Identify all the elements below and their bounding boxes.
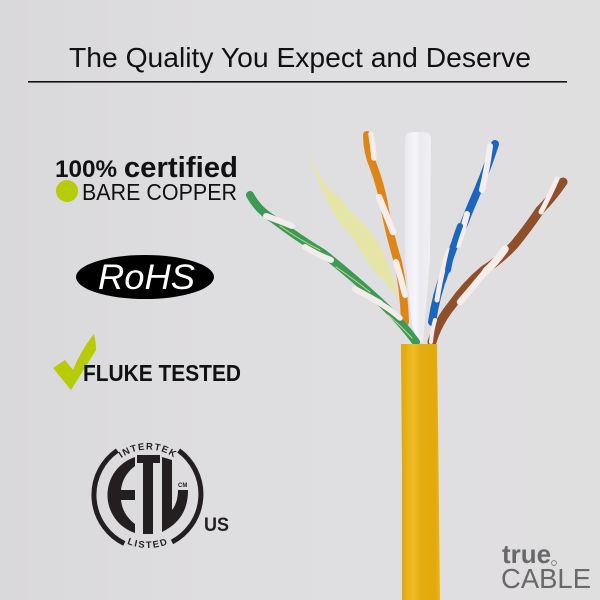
logo: trueCABLE: true bbox=[502, 539, 551, 569]
badge: 100% certified bare copper bbox=[55, 152, 238, 205]
badge: Fluke tested bbox=[53, 334, 241, 390]
wire: yellow pair bbox=[308, 150, 399, 299]
cable wires bbox=[250, 132, 563, 342]
title: The Quality You Expect and Deserve bbox=[69, 42, 531, 73]
logo: ETL listed: INTERTEK bbox=[118, 442, 177, 458]
wire: brown pair bbox=[431, 179, 563, 342]
logo: ETL listed: LISTED bbox=[128, 538, 166, 548]
logo: ETL listed: CM bbox=[178, 483, 187, 489]
badge: RoHS: RoHS bbox=[98, 258, 195, 297]
logo: trueCABLE: CABLE bbox=[501, 563, 591, 594]
badge: 100% certified bare copper: BARE COPPER bbox=[82, 179, 237, 205]
wire: white separator bbox=[405, 132, 431, 342]
badge: RoHS bbox=[76, 255, 214, 299]
logo: ETL listed bbox=[91, 442, 229, 548]
logo: trueCABLE bbox=[501, 539, 591, 594]
cable jacket bbox=[401, 344, 440, 600]
wire: green pair bbox=[250, 195, 416, 342]
badge: Fluke tested: FLUKE TESTED bbox=[83, 360, 241, 386]
badge: 100% certified bare copper: 100% certified bbox=[55, 152, 238, 184]
logo: ETL listed: US bbox=[204, 515, 229, 536]
wire: orange pair bbox=[367, 134, 405, 322]
wire: blue pair bbox=[432, 144, 495, 322]
